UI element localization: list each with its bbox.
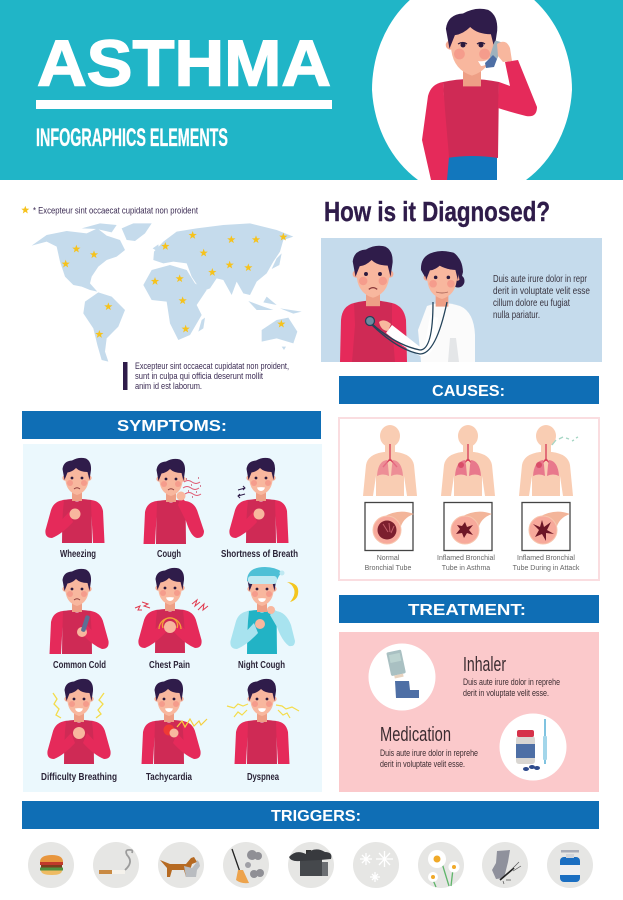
text: inhaler description: derit in voluptate velit esse.: [463, 688, 549, 699]
heading: medication: Medication: [380, 724, 451, 746]
panel: causes: [339, 418, 599, 580]
diagram: attack tube: [522, 502, 570, 550]
heading: how is it diagnosed: How is it Diagnosed?: [324, 196, 550, 227]
label: wheezing: Wheezing: [60, 548, 96, 560]
icon: pollution factory: [288, 842, 334, 888]
panel: symptoms: [23, 444, 322, 792]
figure: common cold: [50, 569, 109, 654]
label: night cough: Night Cough: [238, 659, 285, 671]
diagram: normal lungs: [363, 425, 417, 496]
text: medication description: Duis aute irure dolor in reprehe: [380, 748, 478, 759]
figure: patient: [340, 246, 407, 362]
panel: diagnosis: [321, 238, 602, 362]
subtitle: INFOGRAPHICS ELEMENTS: [36, 124, 228, 152]
label: chest pain: Chest Pain: [149, 659, 190, 671]
figure: dyspnea: [227, 679, 299, 764]
text: inhaler description: [463, 677, 560, 699]
banner: treatment: TREATMENT:: [408, 602, 526, 619]
banner: triggers: TRIGGERS:: [271, 808, 361, 825]
map note: Excepteur sint occaecat cupidatat non proident,: [135, 361, 289, 372]
diagram: attack lungs: [519, 425, 578, 496]
diagnosis text: Duis aute irure dolor in repr: [493, 273, 587, 285]
figure: man using inhaler: [372, 0, 572, 180]
icon: daisies: [418, 842, 464, 888]
captions: [365, 555, 580, 572]
icon: medicine jar: [547, 842, 593, 888]
label: common cold: Common Cold: [53, 659, 106, 671]
figure: night cough: [230, 567, 298, 654]
diagram: asthma tube: [444, 502, 492, 550]
banner: symptoms: SYMPTOMS:: [117, 418, 227, 435]
diagnosis text: derit in voluptate velit esse: [493, 285, 590, 297]
icon: stethoscope: [366, 302, 447, 354]
panel: treatment: [339, 632, 599, 792]
diagram: normal tube: [365, 502, 414, 550]
label: difficulty breathing: Difficulty Breathing: [41, 771, 117, 783]
captions: Tube in Asthma: [442, 565, 490, 572]
map note: sunt in culpa qui officia deserunt mollit: [135, 371, 263, 382]
figure: chest pain: [135, 568, 208, 653]
world map: [32, 223, 302, 362]
banner: treatment: [339, 595, 599, 623]
captions: Inflamed Bronchial: [517, 555, 575, 562]
captions: Tube During in Attack: [513, 565, 580, 572]
icon: snowflakes: [353, 842, 399, 888]
heading: inhaler: Inhaler: [463, 654, 506, 676]
legend: * Excepteur sint occaecat cupidatat non proident: [33, 206, 198, 216]
figure: tachycardia: [142, 679, 207, 764]
text: medication description: derit in voluptate velit esse.: [380, 759, 465, 770]
icon: broom and dust: [223, 842, 269, 888]
header banner: [0, 0, 623, 180]
text: inhaler description: Duis aute irure dolor in reprehe: [463, 677, 560, 688]
label: shortness of breath: Shortness of Breath: [221, 548, 298, 560]
diagram: asthma lungs: [441, 425, 495, 496]
map note: anim id est laborum.: [135, 381, 202, 392]
icon: cigarette: [93, 842, 139, 888]
icon: burger: [28, 842, 74, 888]
captions: Normal: [377, 555, 400, 562]
diagnosis text: nulla pariatur.: [493, 309, 540, 321]
map note: [123, 361, 289, 392]
label: cough: Cough: [157, 548, 181, 560]
figure: shortness of breath: [229, 458, 288, 543]
captions: Inflamed Bronchial: [437, 555, 495, 562]
title underline: [36, 100, 332, 109]
icon: moth: [482, 842, 528, 888]
text: medication description: [380, 748, 478, 770]
figure: wheezing: [45, 458, 104, 543]
captions: Bronchial Tube: [365, 565, 411, 572]
figure: cough: [144, 459, 204, 544]
diagnosis text: cillum dolore eu fugiat: [493, 297, 570, 309]
icon: dog and cat: [158, 842, 204, 888]
label: tachycardia: Tachycardia: [146, 771, 192, 783]
icon: inhaler: [368, 644, 436, 710]
banner: causes: [339, 376, 599, 404]
figure: difficulty breathing: [47, 679, 111, 764]
banner: symptoms: [22, 411, 321, 439]
banner: triggers: [22, 801, 599, 829]
figure: doctor: [379, 251, 475, 362]
icon: medication: [500, 714, 566, 780]
triggers row: [28, 842, 593, 888]
label: dyspnea: Dyspnea: [247, 771, 279, 783]
world map section: [21, 206, 302, 392]
banner: causes: CAUSES:: [432, 383, 505, 400]
diagnosis text: [493, 273, 590, 321]
title: ASTHMA: [37, 26, 331, 100]
